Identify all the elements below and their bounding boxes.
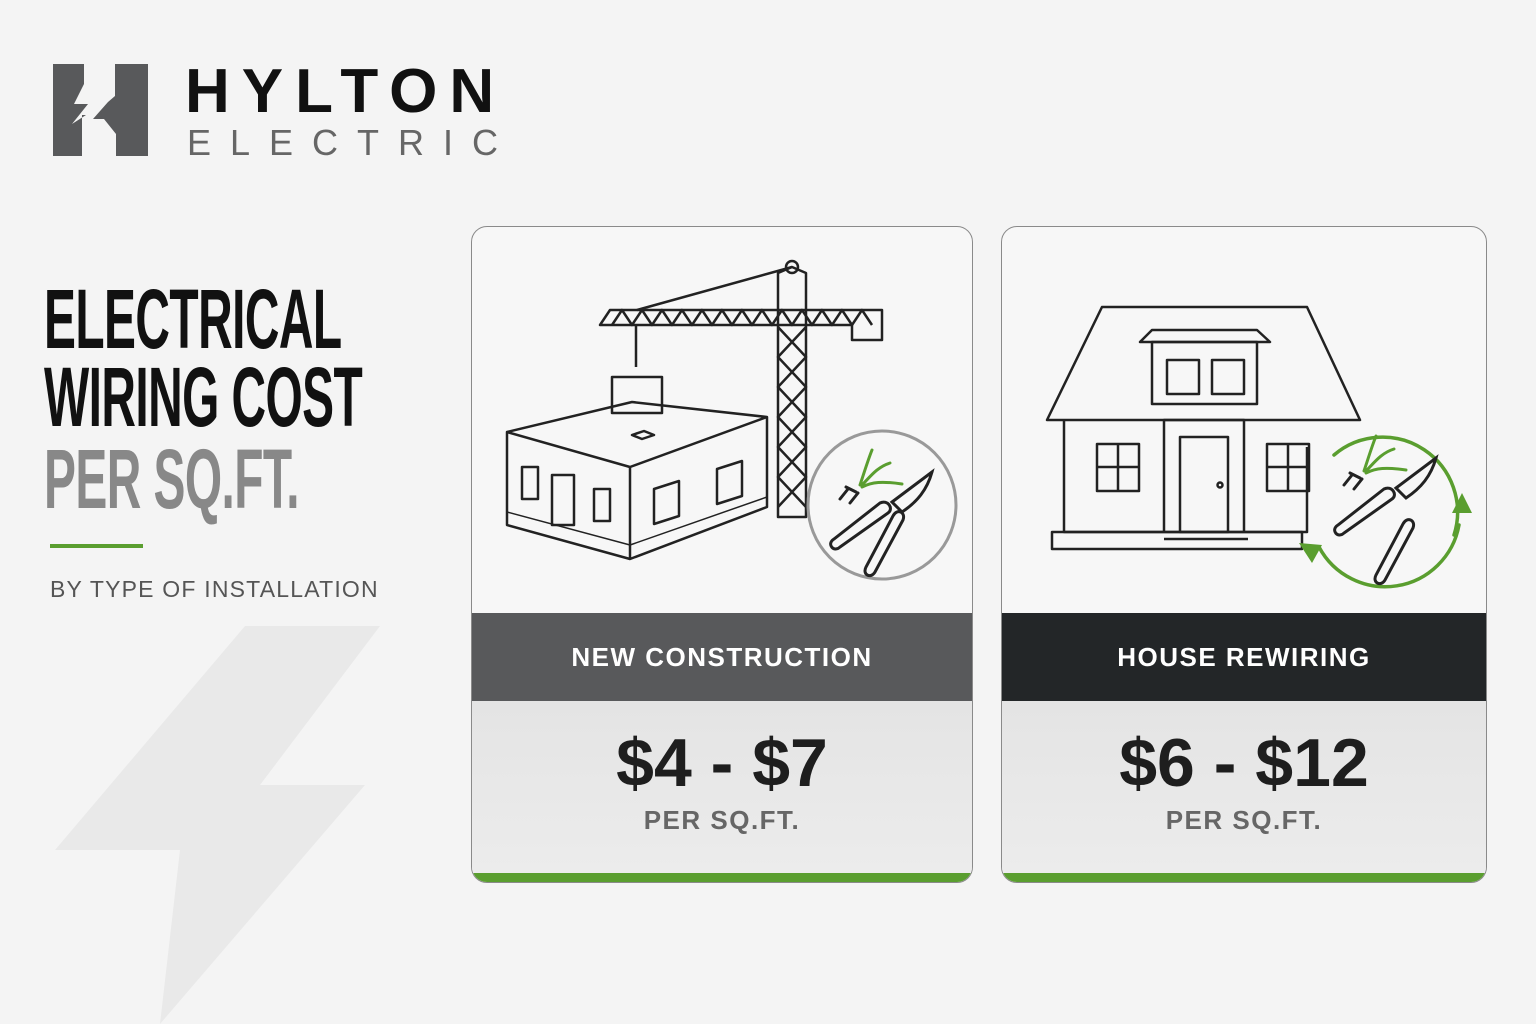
icon: logo mark	[53, 64, 148, 156]
price: house rewiring: PER SQ.FT.	[1166, 805, 1322, 835]
icon: pliers circle	[806, 430, 958, 580]
background lightning bolt	[56, 626, 380, 1024]
divider accent	[50, 544, 143, 548]
band: new construction	[472, 613, 972, 701]
band: new construction: NEW CONSTRUCTION	[571, 642, 873, 672]
band: house rewiring: HOUSE REWIRING	[1117, 642, 1371, 672]
price: new construction	[472, 701, 972, 876]
logo	[53, 57, 517, 163]
icon: house	[1046, 306, 1362, 550]
title: WIRING COST	[44, 350, 362, 444]
title: PER SQ.FT.	[44, 432, 299, 526]
price: house rewiring	[1002, 701, 1486, 876]
price: new construction: $4 - $7	[616, 725, 828, 801]
panel: new construction	[471, 226, 973, 883]
icon: pliers with refresh arrows	[1299, 434, 1472, 588]
band: house rewiring	[1002, 613, 1486, 701]
title: ELECTRICAL	[44, 272, 342, 366]
brand subtitle: ELECTRIC	[187, 122, 517, 163]
panel: house rewiring	[1001, 226, 1487, 883]
subtitle: BY TYPE OF INSTALLATION	[50, 576, 379, 602]
price: house rewiring: $6 - $12	[1119, 725, 1369, 801]
price: new construction: PER SQ.FT.	[644, 805, 800, 835]
title	[44, 272, 362, 526]
brand name: HYLTON	[185, 57, 506, 126]
icon: crane and building	[506, 260, 884, 560]
